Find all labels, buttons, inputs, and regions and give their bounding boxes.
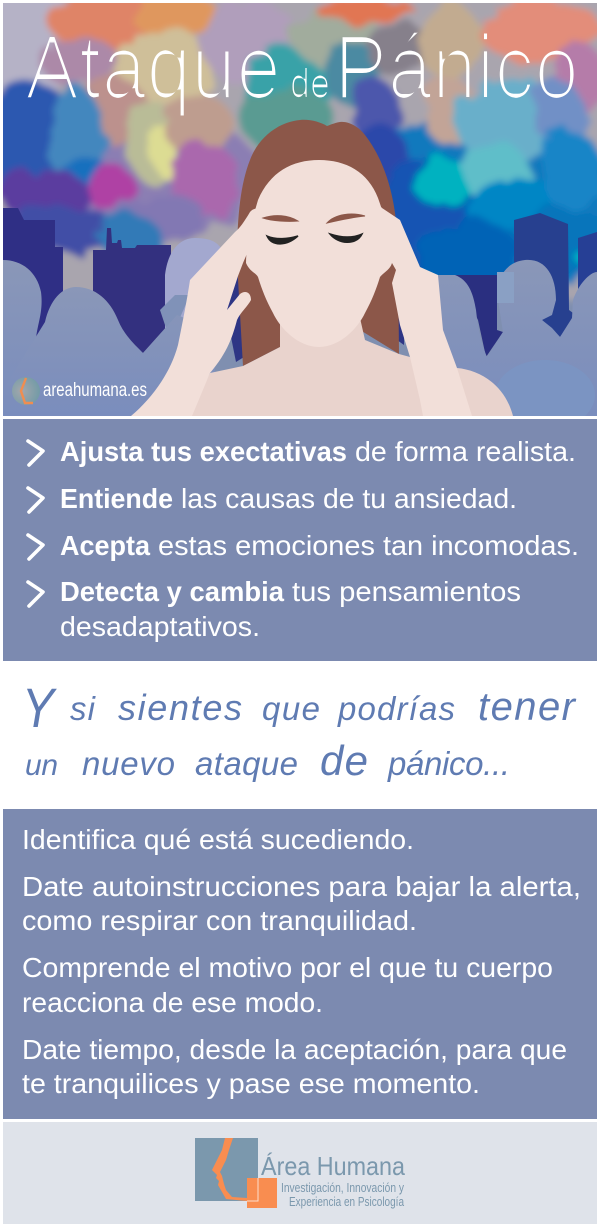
advice text: Comprende el motivo por el que tu cuerpo — [22, 952, 553, 983]
advice text: Date autoinstrucciones para bajar la alerta, — [22, 871, 581, 902]
title — [25, 18, 579, 118]
chest and shoulders — [190, 318, 513, 416]
title: Ataque — [25, 18, 281, 118]
advice text: reacciona de ese modo. — [22, 987, 323, 1018]
tip text: Acepta — [60, 530, 150, 561]
Área Humana logo: Experiencia en Psicología — [289, 1194, 405, 1209]
panel: header illustration — [0, 0, 600, 430]
silhouettes of crowd — [3, 238, 597, 430]
tip text: Detecta y cambia — [60, 576, 284, 607]
advice text: como respirar con tranquilidad. — [22, 905, 417, 936]
city skyline silhouettes — [3, 208, 597, 357]
tip text: estas emociones tan incomodas. — [158, 530, 579, 561]
Área Humana logo: Investigación, Innovación y — [281, 1180, 404, 1195]
handwritten heading: sientes — [118, 687, 242, 728]
advice text: te tranquilices y pase ese momento. — [22, 1068, 480, 1099]
tip text: tus pensamientos — [292, 576, 521, 607]
watercolor background — [0, 0, 600, 300]
chevrons — [28, 441, 43, 606]
handwritten heading: nuevo — [82, 745, 175, 782]
handwritten heading — [22, 676, 577, 784]
advice text: Date tiempo, desde la aceptación, para que — [22, 1034, 567, 1065]
panel: what to do — [3, 809, 597, 1119]
closed eyes — [267, 234, 362, 244]
panel: tips — [3, 419, 597, 661]
small logo badge — [12, 377, 147, 405]
handwritten heading: Y — [22, 676, 57, 739]
tip text: de forma realista. — [355, 436, 576, 467]
title: de — [290, 62, 330, 106]
Área Humana logo: Área Humana — [261, 1151, 405, 1181]
handwritten heading: tener — [478, 685, 577, 729]
tip text: desadaptativos. — [60, 611, 260, 642]
handwritten heading: de — [320, 737, 368, 784]
handwritten heading: pánico... — [387, 745, 510, 782]
small logo badge: areahumana.es — [43, 380, 147, 401]
advice text: Identifica qué está sucediendo. — [22, 824, 414, 855]
Área Humana logo — [195, 1138, 405, 1209]
tip text: Ajusta tus exectativas — [60, 436, 347, 467]
woman illustration — [131, 120, 513, 416]
tip text — [60, 436, 579, 642]
tip text: Entiende — [60, 483, 173, 514]
handwritten heading: si — [70, 690, 97, 727]
left hand — [131, 209, 263, 416]
eyebrows — [263, 214, 365, 223]
handwritten heading: ataque — [195, 745, 298, 782]
advice text — [22, 824, 581, 1099]
tip text: las causas de tu ansiedad. — [181, 483, 517, 514]
handwritten heading: un — [25, 749, 58, 782]
handwritten heading: podrías — [337, 690, 455, 727]
blue gap behind fingers — [226, 270, 404, 362]
handwritten heading: que — [262, 690, 320, 727]
panel: footer — [3, 1122, 597, 1224]
hair — [237, 120, 399, 366]
face — [246, 160, 392, 347]
right hand — [381, 207, 472, 416]
